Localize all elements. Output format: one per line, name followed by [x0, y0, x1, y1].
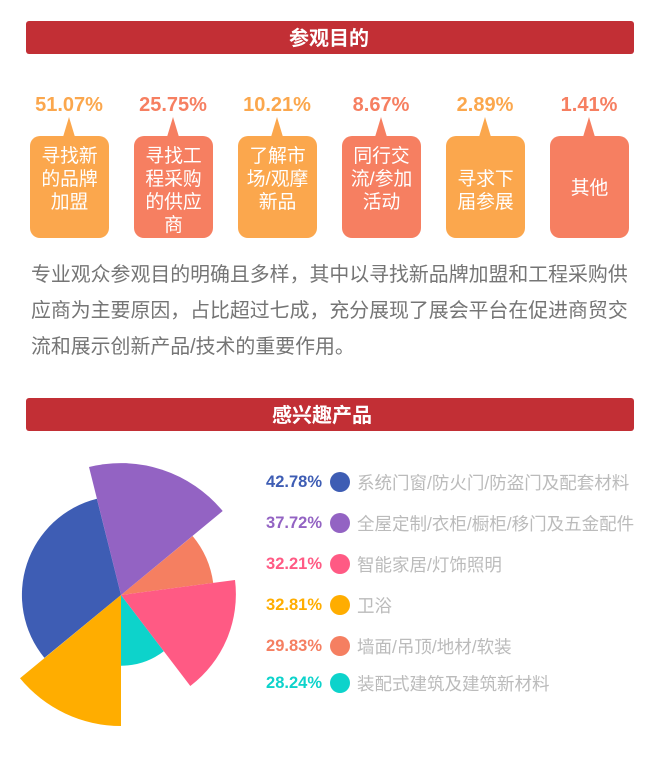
sector: purple — [89, 463, 223, 595]
legend row 3: 智能家居/灯饰照明 — [357, 555, 502, 575]
purpose 3: 新品 — [259, 190, 296, 212]
purpose 6 — [550, 94, 629, 238]
purpose 2: 的供应 — [145, 190, 202, 212]
legend row 1: 系统门窗/防火门/防盗门及配套材料 — [357, 473, 629, 493]
sector: salmon — [121, 536, 213, 595]
sector: yellow — [20, 595, 121, 726]
legend row 6: 28.24% — [266, 674, 322, 692]
purpose 5: 2.89% — [457, 94, 513, 116]
purpose 4: 8.67% — [353, 94, 409, 116]
legend row 4: 32.81% — [266, 596, 322, 614]
purpose 1: 51.07% — [35, 94, 103, 116]
purpose 2: 寻找工 — [145, 144, 202, 166]
legend row 2: 37.72% — [266, 514, 322, 532]
purpose 1: 寻找新 — [41, 144, 98, 166]
legend row 1: 42.78% — [266, 473, 322, 491]
legend row 6 — [266, 673, 550, 694]
legend row 4: 卫浴 — [357, 596, 392, 616]
text block: summary paragraph — [31, 264, 628, 358]
legend row 4 — [266, 595, 392, 616]
text block: summary paragraph: 流和展示创新产品/技术的重要作用。 — [31, 336, 355, 358]
legend — [266, 472, 634, 694]
purpose 4: 活动 — [363, 190, 400, 212]
legend row 2: 全屋定制/衣柜/橱柜/移门及五金配件 — [357, 514, 634, 534]
legend row 6: 装配式建筑及建筑新材料 — [357, 674, 550, 694]
legend row 3 — [266, 554, 502, 575]
purpose 6: 1.41% — [561, 94, 617, 116]
text block: summary paragraph: 应商为主要原因，占比超过七成，充分展现了展会平台在促进商贸交 — [31, 300, 628, 322]
heading: 感兴趣产品 — [26, 398, 634, 431]
heading: 感兴趣产品: 感兴趣产品 — [272, 405, 372, 427]
chart: rose pie — [20, 463, 236, 726]
purpose 1: 的品牌 — [41, 168, 98, 188]
purpose 5: 寻求下 — [457, 168, 514, 188]
sector: blue — [22, 499, 121, 658]
purpose 2: 程采购 — [145, 168, 202, 188]
purpose 4: 流/参加 — [351, 168, 412, 188]
purpose 2: 25.75% — [139, 94, 207, 116]
purpose 3: 场/观摩 — [247, 168, 308, 188]
purpose 5: 届参展 — [457, 190, 514, 212]
heading: 参观目的: 参观目的 — [289, 28, 369, 50]
legend row 3: 32.21% — [266, 555, 322, 573]
sector: teal — [121, 595, 164, 666]
legend row 5: 29.83% — [266, 637, 322, 655]
panel: visit purposes — [30, 94, 629, 238]
purpose 3: 10.21% — [243, 94, 311, 116]
purpose 1: 加盟 — [51, 190, 88, 212]
legend row 5 — [266, 636, 512, 657]
text block: summary paragraph: 专业观众参观目的明确且多样，其中以寻找新品牌加盟和工程采购供 — [31, 264, 628, 286]
purpose 6: 其他 — [571, 176, 608, 198]
heading: 参观目的 — [26, 21, 634, 54]
purpose 3: 了解市 — [249, 144, 306, 166]
purpose 5 — [446, 94, 525, 238]
sector: pink — [121, 580, 236, 686]
purpose 3 — [238, 94, 317, 238]
purpose 2: 商 — [164, 214, 183, 234]
purpose 1 — [30, 94, 109, 238]
purpose 4 — [342, 94, 421, 238]
legend row 5: 墙面/吊顶/地材/软装 — [357, 637, 512, 657]
purpose 4: 同行交 — [353, 144, 410, 166]
purpose 2 — [134, 94, 213, 238]
